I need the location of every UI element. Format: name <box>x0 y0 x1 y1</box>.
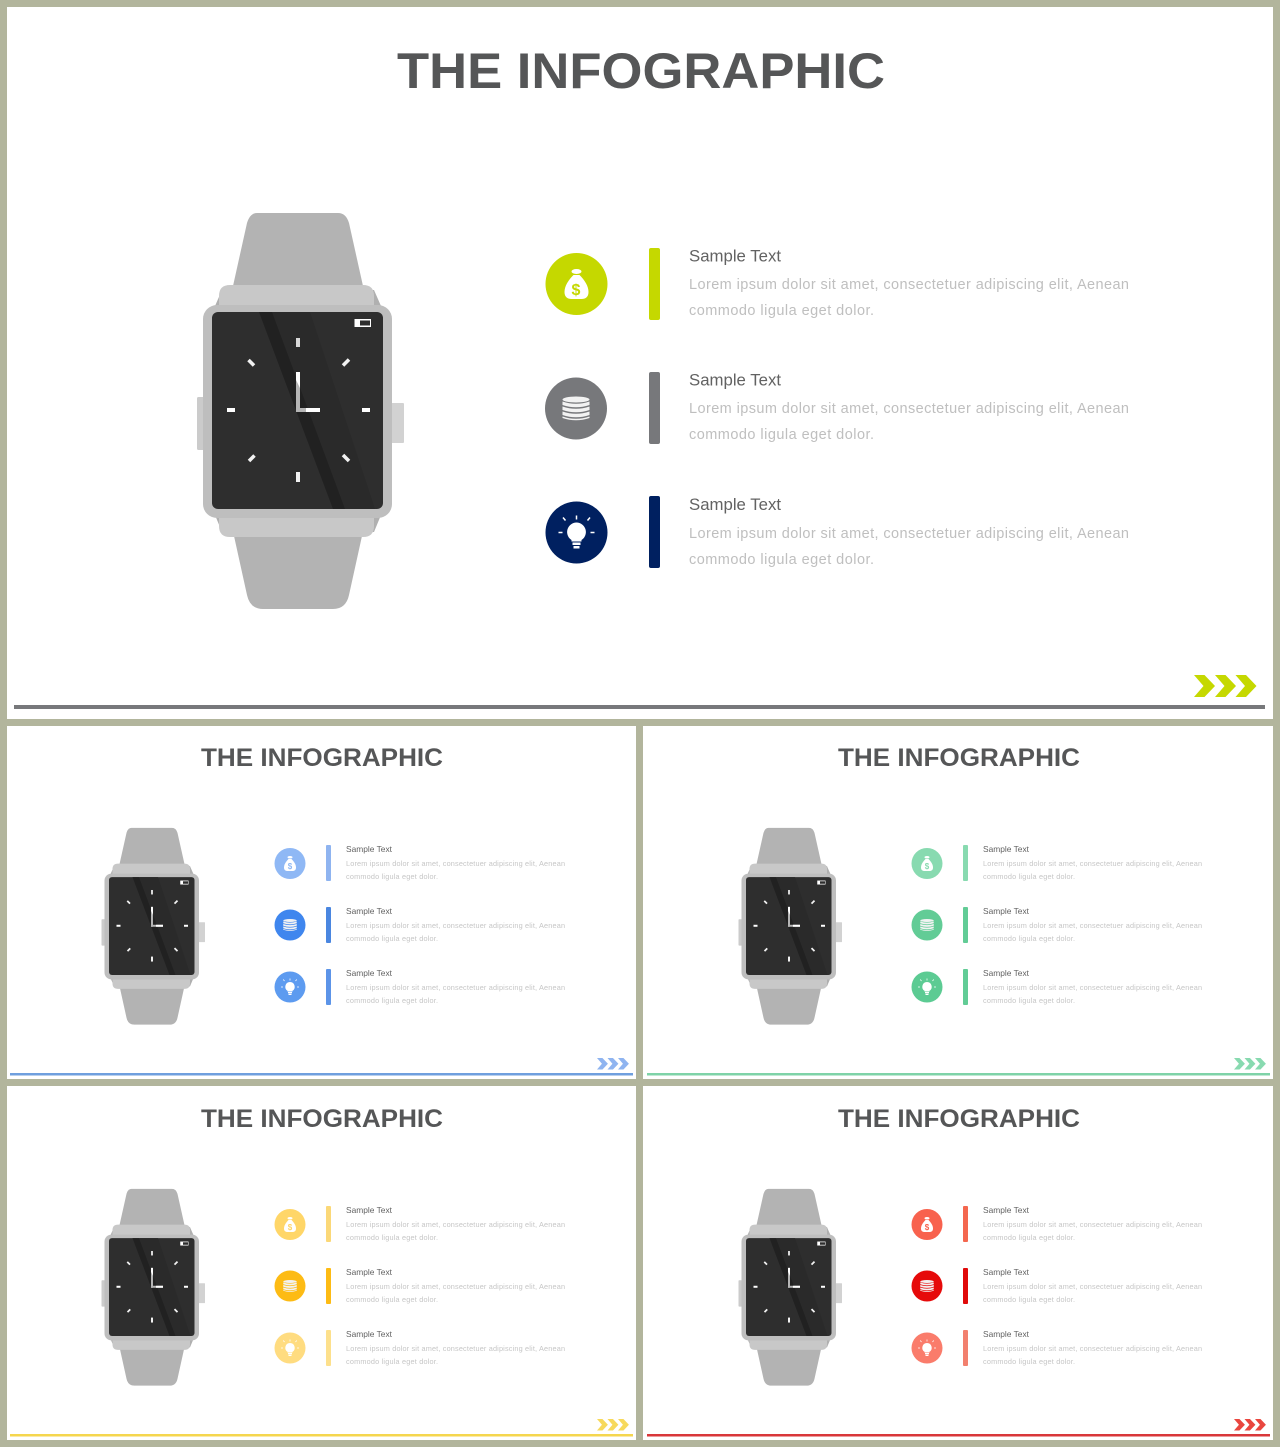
text block: items: Lorem ipsum dolor sit amet, consectetuer adipiscing elit, Aenean <box>983 1220 1202 1229</box>
item 1: money bag: commodo ligula eget dolor. <box>689 303 874 319</box>
text block: items: commodo ligula eget dolor. <box>983 996 1075 1005</box>
text block: items: Lorem ipsum dolor sit amet, consectetuer adipiscing elit, Aenean <box>346 921 565 930</box>
icon: money bag: $ <box>288 1223 293 1232</box>
item 2: coins: Sample Text <box>689 370 781 390</box>
item 1: money bag: Sample Text <box>689 246 781 266</box>
text block: items: Lorem ipsum dolor sit amet, consectetuer adipiscing elit, Aenean <box>983 1282 1202 1291</box>
smartwatch illustration <box>102 828 205 1025</box>
icon: money bag <box>274 848 306 879</box>
icon: money bag <box>546 253 608 315</box>
icon: money bag <box>912 848 942 879</box>
title: THE INFOGRAPHIC <box>838 744 1080 772</box>
text block: items: Lorem ipsum dolor sit amet, consectetuer adipiscing elit, Aenean <box>346 983 565 992</box>
text block: items: commodo ligula eget dolor. <box>983 934 1075 943</box>
smartwatch illustration <box>197 213 404 609</box>
title: THE INFOGRAPHIC <box>397 43 885 99</box>
text block: items: Sample Text <box>983 1267 1030 1277</box>
item 1: money bag: Lorem ipsum dolor sit amet, consectetuer adipiscing elit, Aenean <box>689 277 1129 293</box>
item 1: money bag <box>546 246 1129 320</box>
item 2: coins: commodo ligula eget dolor. <box>689 427 874 443</box>
text block: items: commodo ligula eget dolor. <box>346 1233 438 1242</box>
text block: items: Sample Text <box>346 1267 393 1277</box>
arrows: chevrons <box>1234 1419 1266 1430</box>
text block: items: Sample Text <box>983 1205 1030 1215</box>
icon: money bag: $ <box>925 862 930 871</box>
text block: items <box>346 1205 565 1366</box>
text block: items: Sample Text <box>983 906 1030 916</box>
smartwatch illustration <box>738 828 842 1025</box>
text block: items: Lorem ipsum dolor sit amet, consectetuer adipiscing elit, Aenean <box>983 859 1202 868</box>
panel: green variant <box>643 726 1273 1079</box>
text block: items: Lorem ipsum dolor sit amet, consectetuer adipiscing elit, Aenean <box>346 1220 565 1229</box>
item 3: light bulb <box>546 495 1129 568</box>
item 2: coins: Lorem ipsum dolor sit amet, consectetuer adipiscing elit, Aenean <box>689 401 1129 417</box>
text block: items: Sample Text <box>983 968 1030 978</box>
text block: items: Sample Text <box>983 1329 1030 1339</box>
title: THE INFOGRAPHIC <box>838 1105 1080 1133</box>
panel: yellow variant <box>7 1086 636 1440</box>
text block: items: Lorem ipsum dolor sit amet, consectetuer adipiscing elit, Aenean <box>346 1344 565 1353</box>
text block: items: Lorem ipsum dolor sit amet, consectetuer adipiscing elit, Aenean <box>346 859 565 868</box>
text block: items: commodo ligula eget dolor. <box>983 1295 1075 1304</box>
icon: light bulb <box>912 1332 942 1364</box>
title: THE INFOGRAPHIC <box>201 744 443 772</box>
panel: blue variant <box>7 726 636 1079</box>
text block: items: commodo ligula eget dolor. <box>346 1357 438 1366</box>
text block: items: commodo ligula eget dolor. <box>346 996 438 1005</box>
text block: items: Lorem ipsum dolor sit amet, consectetuer adipiscing elit, Aenean <box>346 1282 565 1291</box>
text block: items <box>983 844 1202 1005</box>
text block: items: Lorem ipsum dolor sit amet, consectetuer adipiscing elit, Aenean <box>983 1344 1202 1353</box>
icon: light bulb <box>274 972 306 1002</box>
text block: items: Lorem ipsum dolor sit amet, consectetuer adipiscing elit, Aenean <box>983 921 1202 930</box>
text block: items <box>983 1205 1202 1366</box>
arrows: chevrons <box>1194 675 1256 697</box>
text block: items: Sample Text <box>346 1329 393 1339</box>
text block: items: commodo ligula eget dolor. <box>983 1357 1075 1366</box>
text block: items: commodo ligula eget dolor. <box>983 872 1075 881</box>
text block: items: commodo ligula eget dolor. <box>983 1233 1075 1242</box>
smartwatch illustration <box>738 1189 842 1386</box>
icon: coin stack <box>274 1270 306 1302</box>
text block: items: Sample Text <box>346 844 393 854</box>
icon: money bag: $ <box>572 282 581 299</box>
panel: main slide <box>7 7 1273 719</box>
item 3: light bulb: Lorem ipsum dolor sit amet, consectetuer adipiscing elit, Aenean <box>689 526 1129 542</box>
panel: red variant <box>643 1086 1273 1440</box>
arrows: chevrons <box>597 1419 629 1430</box>
icon: money bag: $ <box>288 862 293 871</box>
title: THE INFOGRAPHIC <box>201 1105 443 1133</box>
text block: items: commodo ligula eget dolor. <box>346 1295 438 1304</box>
item 3: light bulb: commodo ligula eget dolor. <box>689 552 874 568</box>
icon: coin stack <box>912 1270 942 1302</box>
text block: items: Sample Text <box>346 1205 393 1215</box>
icon: light bulb <box>274 1332 306 1364</box>
item 3: light bulb: Sample Text <box>689 495 781 514</box>
text block: items <box>346 844 565 1005</box>
smartwatch illustration <box>102 1189 205 1386</box>
icon: coin stack <box>545 378 607 440</box>
icon: money bag <box>274 1209 306 1240</box>
arrows: chevrons <box>597 1058 629 1069</box>
icon: light bulb <box>546 502 608 564</box>
text block: items: commodo ligula eget dolor. <box>346 934 438 943</box>
icon: light bulb <box>912 972 942 1002</box>
text block: items: Sample Text <box>983 844 1030 854</box>
arrows: chevrons <box>1234 1058 1266 1069</box>
icon: money bag: $ <box>925 1223 930 1232</box>
item 2: coins <box>545 370 1129 444</box>
text block: items: Sample Text <box>346 906 393 916</box>
text block: items: Sample Text <box>346 968 393 978</box>
text block: items: Lorem ipsum dolor sit amet, consectetuer adipiscing elit, Aenean <box>983 983 1202 992</box>
icon: coin stack <box>912 910 942 940</box>
icon: money bag <box>912 1209 942 1240</box>
icon: coin stack <box>274 910 306 940</box>
text block: items: commodo ligula eget dolor. <box>346 872 438 881</box>
